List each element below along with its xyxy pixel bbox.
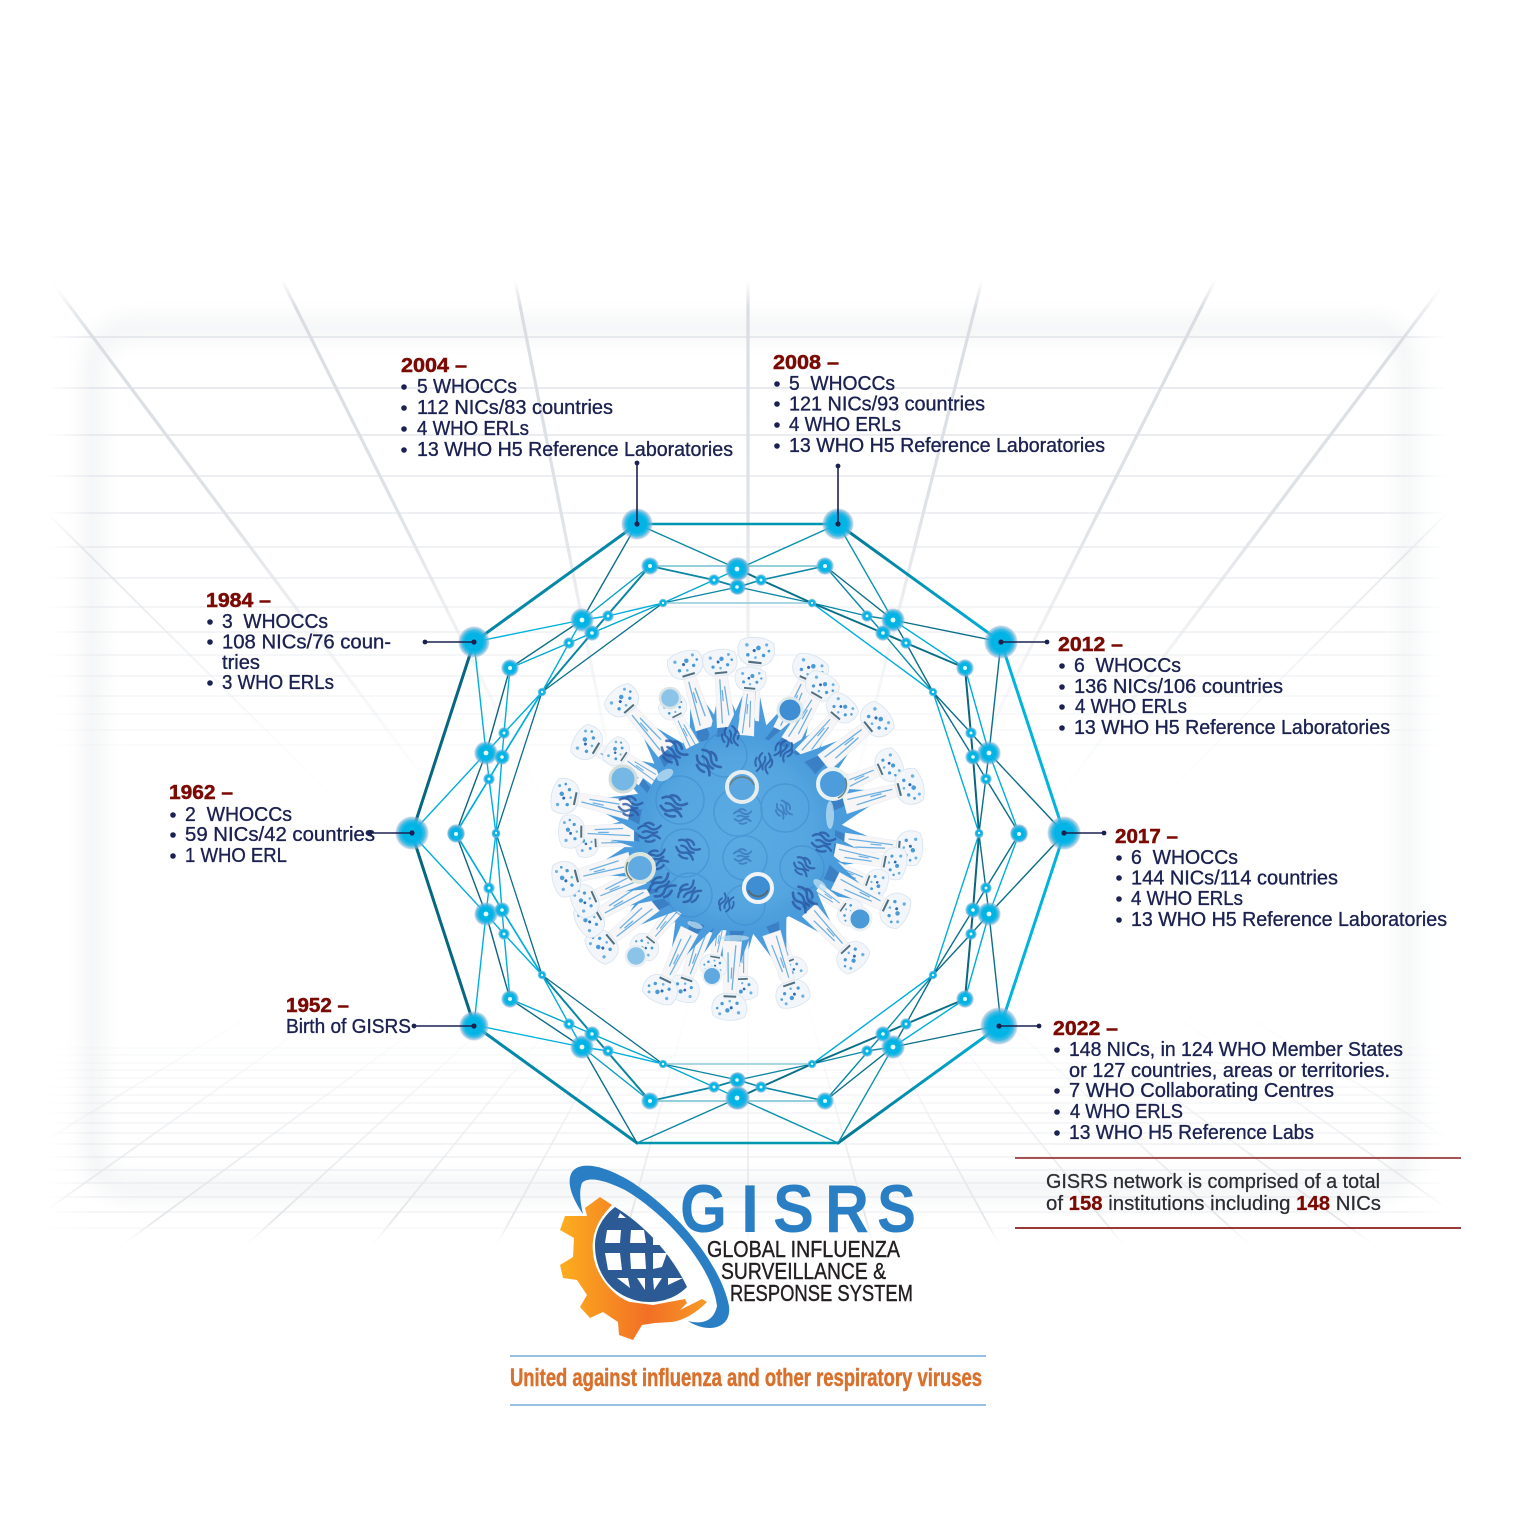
- logo: full name: RESPONSE SYSTEM: [730, 1280, 913, 1306]
- text block: 2008: 13 WHO H5 Reference Laboratories: [789, 435, 1105, 457]
- tagline: United against influenza and other respiratory viruses: [510, 1364, 982, 1392]
- text block: 1952: Birth of GISRS: [286, 1016, 411, 1038]
- text block: 2008: 5 WHOCCs: [789, 373, 895, 395]
- text block: 2017: 13 WHO H5 Reference Laboratories: [1131, 909, 1447, 931]
- logo: blue orbit ring: [570, 1166, 729, 1328]
- text block: 2017: 6 WHOCCs: [1131, 847, 1238, 869]
- logo: full name: GLOBAL INFLUENZA: [707, 1236, 901, 1262]
- text block: 2012: 6 WHOCCs: [1074, 655, 1181, 677]
- logo: full name: SURVEILLANCE &: [721, 1258, 886, 1284]
- text block: 2012: 4 WHO ERLs: [1075, 696, 1187, 718]
- text block: 2022: 13 WHO H5 Reference Labs: [1069, 1122, 1314, 1144]
- text block: 2017: 2017 –: [1115, 826, 1178, 848]
- text block: 2008: [773, 352, 1105, 457]
- text block: 1984: tries: [222, 652, 260, 674]
- GISRS logo: [560, 1166, 916, 1340]
- callout: network total: of 158 institutions including 148 NICs: [1046, 1193, 1381, 1215]
- text block: 2022: 2022 –: [1053, 1018, 1118, 1040]
- virus spikes: [545, 634, 931, 1022]
- callout: network total: [1015, 1158, 1461, 1228]
- logo: GISRS wordmark: G: [680, 1171, 727, 1247]
- network decagon: [412, 524, 1064, 1143]
- text block: 2012: 2012 –: [1058, 634, 1123, 656]
- logo: GISRS wordmark: I: [741, 1171, 759, 1247]
- text block: 2022: [1053, 1018, 1403, 1144]
- text block: 2017: 4 WHO ERLs: [1131, 888, 1243, 910]
- text block: 2022: 7 WHO Collaborating Centres: [1069, 1080, 1334, 1102]
- leader lines and outer year nodes: [368, 461, 1106, 1045]
- text block: 2022: 4 WHO ERLS: [1070, 1101, 1183, 1123]
- logo: full name: [707, 1236, 913, 1306]
- text block: 1962: 1962 –: [169, 782, 233, 804]
- text block: 2022: or 127 countries, areas or territories.: [1069, 1060, 1390, 1082]
- text block: 1952: 1952 –: [286, 995, 349, 1017]
- text block: 2012: 13 WHO H5 Reference Laboratories: [1074, 717, 1390, 739]
- text block: 1984: 3 WHOCCs: [222, 611, 328, 633]
- logo: GISRS wordmark: S: [877, 1171, 916, 1247]
- network edges: [412, 524, 1064, 1143]
- logo: GISRS wordmark: [680, 1171, 916, 1247]
- logo: globe: [595, 1207, 687, 1302]
- text block: 2008: 121 NICs/93 countries: [789, 394, 985, 416]
- text block: 2004: 13 WHO H5 Reference Laboratories: [417, 439, 733, 461]
- text block: 2004: 4 WHO ERLs: [417, 418, 529, 440]
- text block: 1962: 2 WHOCCs: [185, 804, 292, 826]
- text block: 2012: [1058, 634, 1390, 739]
- text block: 1952: [286, 995, 411, 1038]
- text block: 2012: 136 NICs/106 countries: [1074, 676, 1283, 698]
- text block: 1984: 3 WHO ERLs: [222, 672, 334, 694]
- text block: 1962: [169, 782, 375, 867]
- virus illustration: [545, 634, 931, 1022]
- text block: 2017: [1115, 826, 1447, 931]
- text block: 2008: 4 WHO ERLs: [789, 414, 901, 436]
- text block: 1962: 59 NICs/42 countries: [185, 824, 375, 846]
- text block: 2004: [401, 355, 733, 461]
- text block: 2008: 2008 –: [773, 352, 839, 374]
- inner network nodes: [447, 557, 1028, 1110]
- text block: 2017: 144 NICs/114 countries: [1131, 868, 1338, 890]
- text block: 2004: 2004 –: [401, 355, 467, 377]
- callout: network total: GISRS network is comprised of a total: [1046, 1171, 1380, 1193]
- text block: 1984: [206, 590, 391, 694]
- text block: 1984: 1984 –: [206, 590, 271, 612]
- logo: GISRS wordmark: R: [825, 1171, 869, 1247]
- logo: gear and hand: [560, 1197, 707, 1340]
- text block: 2004: 112 NICs/83 countries: [417, 397, 613, 419]
- text block: 2004: 5 WHOCCs: [417, 376, 517, 398]
- virus highlight spheres: [610, 688, 871, 985]
- text block: 1962: 1 WHO ERL: [185, 845, 287, 867]
- text block: 2022: 148 NICs, in 124 WHO Member States: [1069, 1039, 1403, 1061]
- text block: 1984: 108 NICs/76 coun-: [222, 632, 391, 654]
- logo: GISRS wordmark: S: [773, 1171, 814, 1247]
- virus core: [616, 725, 836, 941]
